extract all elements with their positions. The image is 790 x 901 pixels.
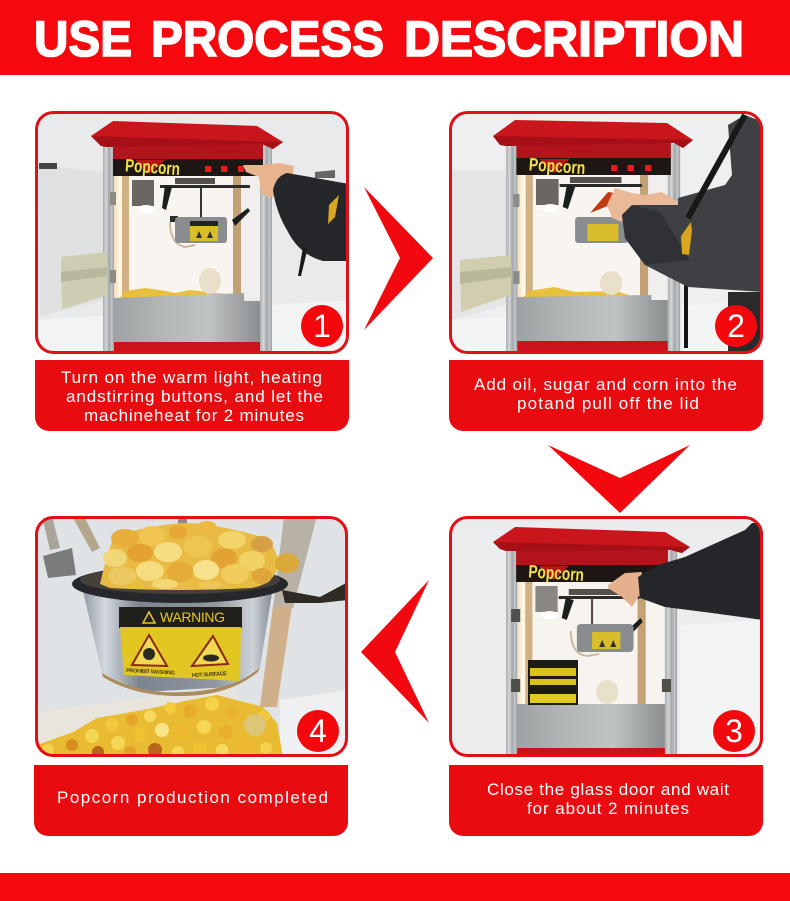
photo: adding ingredients [449,111,763,355]
warning label: HOT SURFACE [192,671,227,679]
panel: step 1 [35,111,349,354]
footer banner [0,873,790,901]
caption: step 2: Add oil, sugar and corn into the [474,375,737,394]
arrow: step 1 to step 2 [364,187,433,330]
photo: pressing machine buttons: Popcorn [124,155,181,179]
caption: step 3: Close the glass door and wait [487,780,729,799]
step number badge 2: 2 [727,308,745,344]
frame [450,518,762,756]
panel: step 4 [35,516,348,758]
photo: closing glass door [449,516,763,760]
warning label: PROHIBIT WASHING [126,668,175,677]
step number badge 1: 1 [313,308,331,344]
title: USE [34,11,132,67]
photo: adding ingredients: Popcorn [528,154,586,178]
panel: step 3 [449,516,763,760]
caption: step 2 [449,360,763,431]
step number badge 1 [301,305,343,347]
step number badge 2 [715,305,757,347]
title: DESCRIPTION [404,11,744,67]
caption: step 4: Popcorn production completed [57,788,328,807]
panel: step 2 [449,111,763,355]
popcorn in kettle [100,521,278,590]
frame [36,112,348,352]
title: PROCESS [151,11,384,67]
photo: kettle full of popcorn [35,516,348,758]
step number badge 4: 4 [309,713,327,749]
step number badge 4 [297,710,339,752]
caption: step 3: for about 2 minutes [527,799,689,818]
caption: step 2: potand pull off the lid [517,394,699,413]
photo: closing glass door: Popcorn [528,561,585,585]
caption: step 3 [449,765,763,836]
step number badge 3: 3 [725,713,743,749]
warning label: WARNING [160,609,225,625]
caption: step 4 [34,765,348,836]
caption: step 1: Turn on the warm light, heating [61,368,322,387]
header banner [0,0,790,75]
arrow: step 3 to step 4 [361,580,429,723]
popcorn in tray [37,695,283,758]
photo: pressing machine buttons [35,111,349,354]
frame [36,518,346,756]
step number badge 3 [713,710,755,752]
frame [450,112,762,352]
caption: step 1: machineheat for 2 minutes [84,406,304,425]
arrow: step 2 to step 3 [548,445,690,513]
caption: step 1: andstirring buttons, and let the [66,387,323,406]
warning label [119,607,242,681]
caption: step 1 [35,360,349,431]
